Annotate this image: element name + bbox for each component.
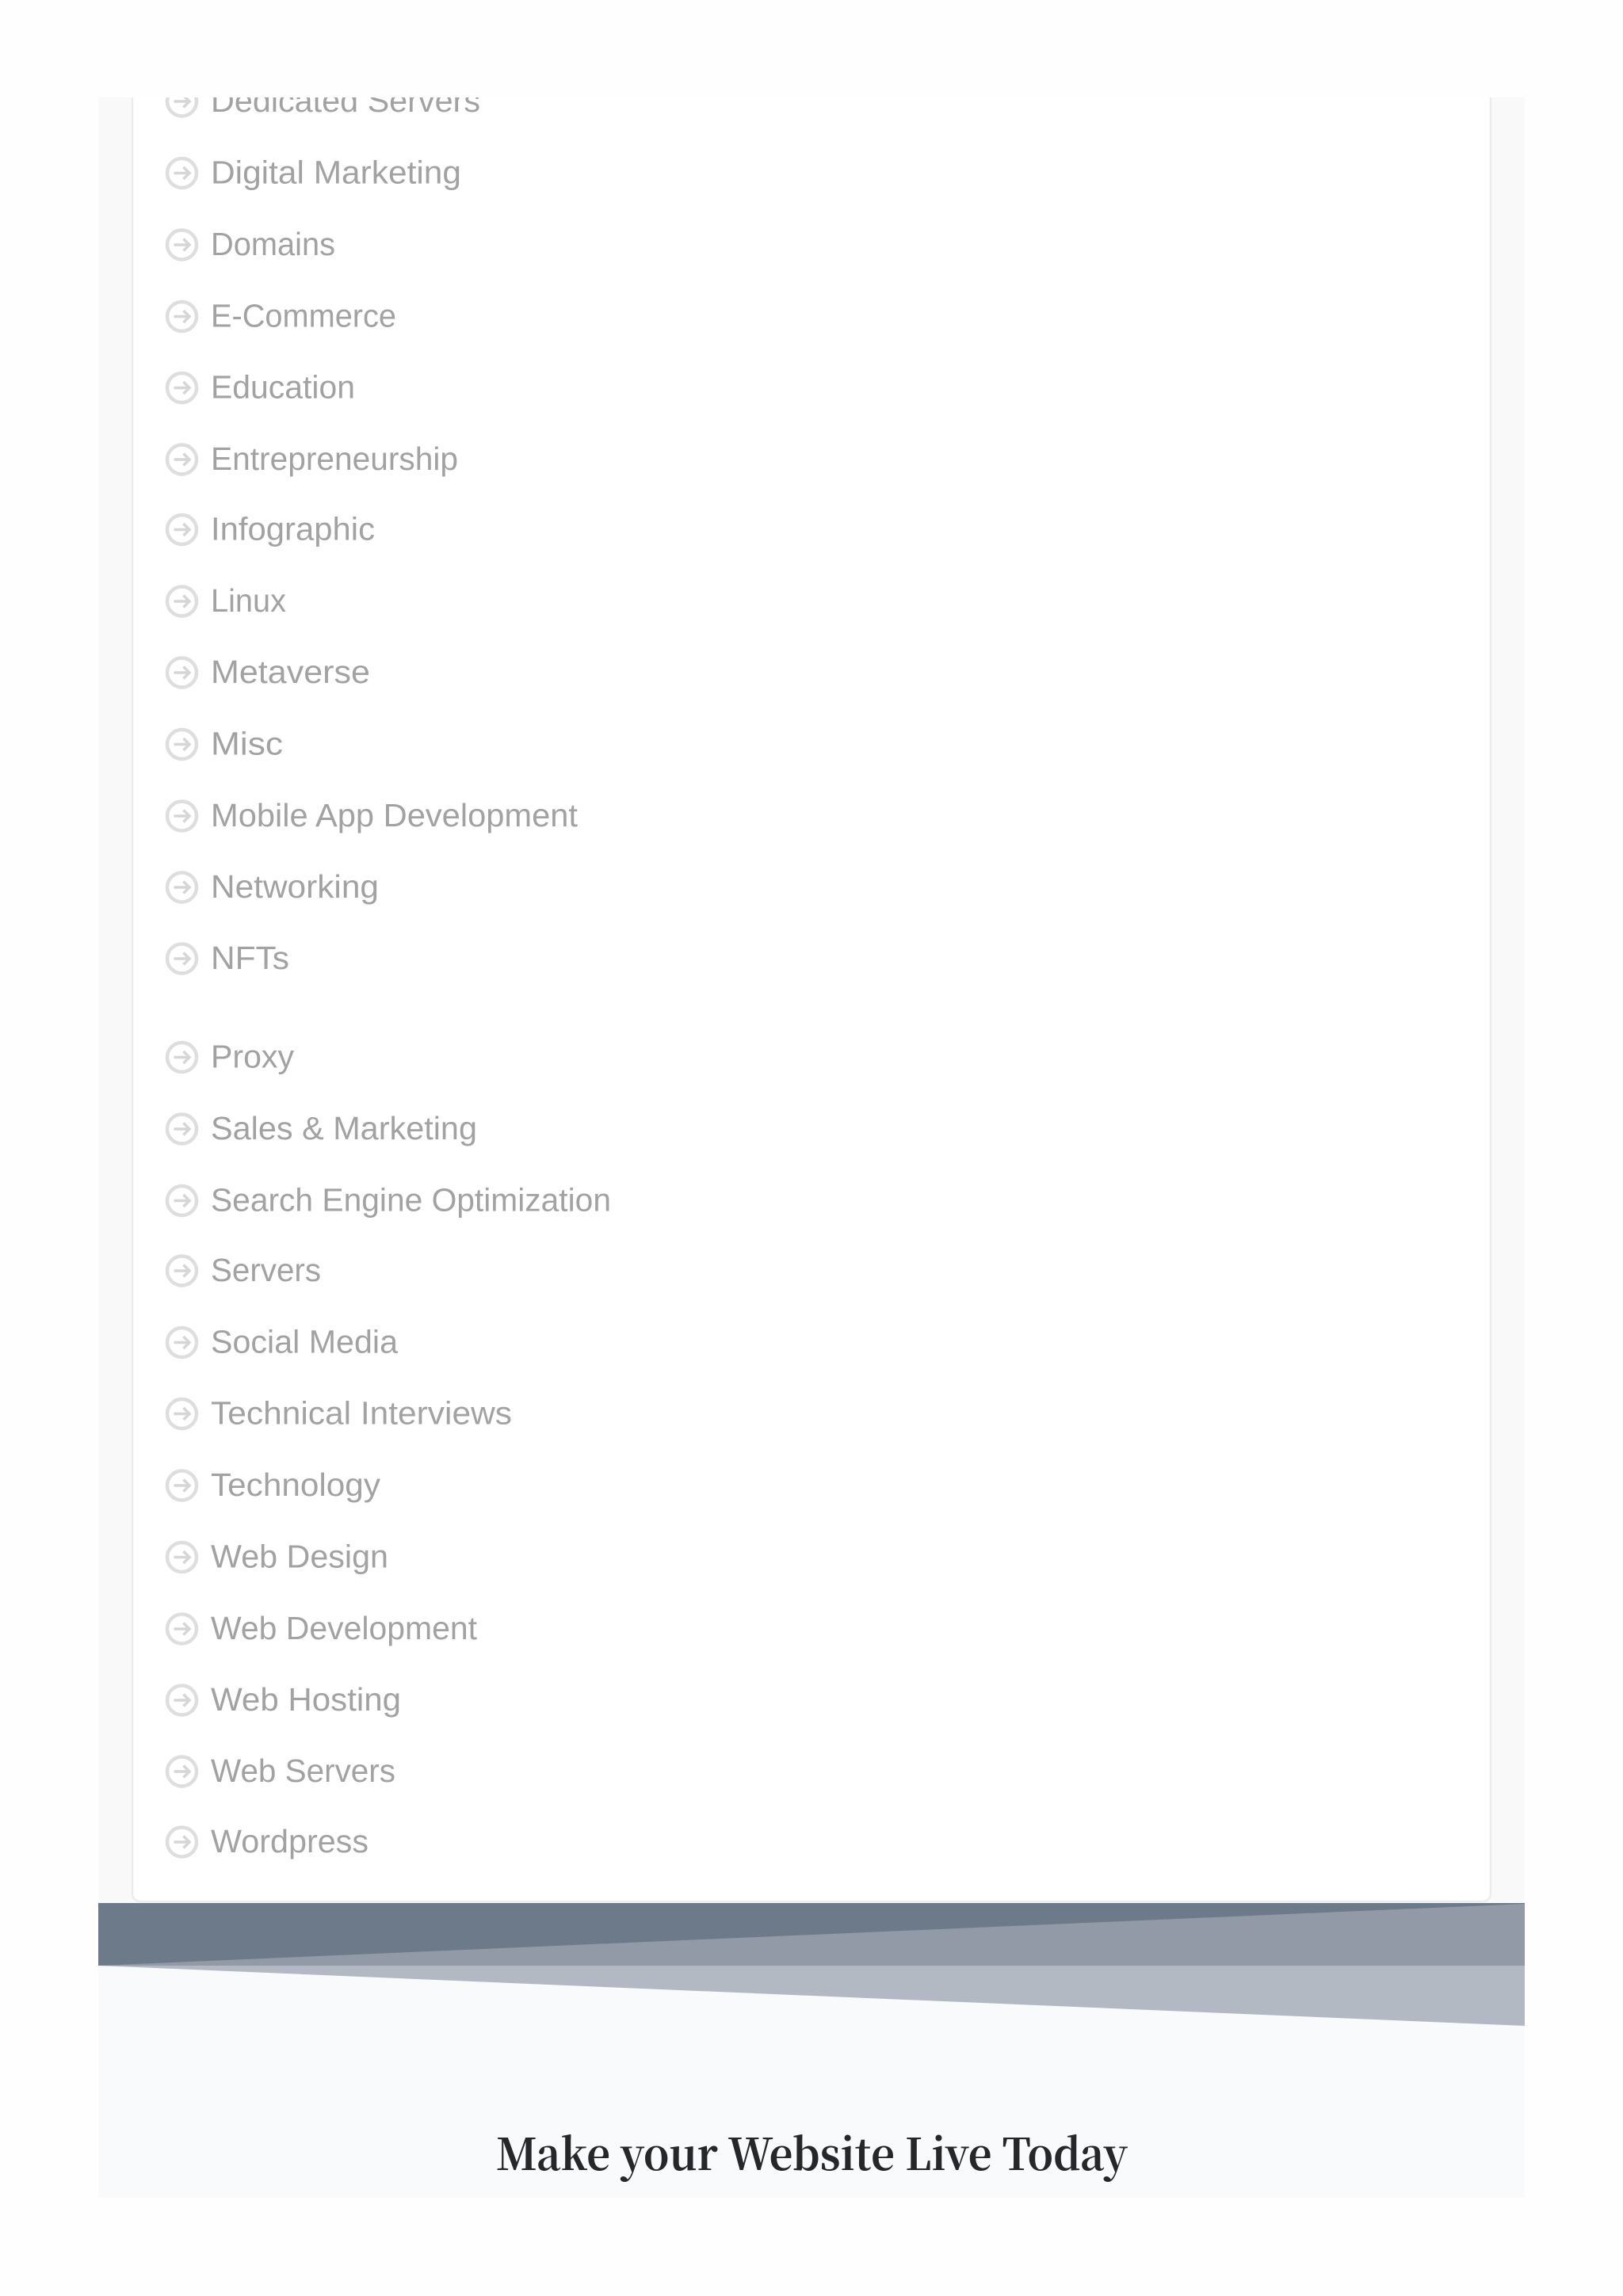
list item: Entrepreneurship: Entrepreneurship	[211, 441, 458, 477]
heading: Make your Website Live Today: Make your Website Live Today	[496, 2120, 1128, 2183]
list item: Servers: Servers	[211, 1252, 321, 1288]
panel: category list card	[132, 63, 1491, 1901]
list item: Linux	[167, 582, 286, 619]
panel: grey sidebar backdrop	[98, 97, 1525, 1904]
list item: Web Design: Web Design	[211, 1539, 388, 1575]
list item: Proxy: Proxy	[211, 1038, 294, 1074]
list item: Dedicated Servers	[165, 97, 479, 118]
panel: footer background	[98, 1966, 1525, 2198]
list item: Infographic: Infographic	[211, 510, 375, 547]
list item: Domains: Domains	[211, 226, 335, 262]
list item: Digital Marketing: Digital Marketing	[211, 154, 461, 190]
list item: Proxy	[167, 1038, 294, 1074]
list item: Networking: Networking	[211, 868, 379, 905]
list item: Web Development: Web Development	[211, 1610, 478, 1646]
list item: Web Hosting: Web Hosting	[211, 1681, 401, 1718]
list item: Web Servers: Web Servers	[211, 1753, 395, 1789]
list item: Misc	[167, 726, 283, 762]
footer angled band	[98, 1903, 1525, 2026]
list item: Search Engine Optimization: Search Engine Optimization	[211, 1182, 611, 1219]
list item: NFTs	[167, 940, 289, 976]
list item: Dedicated Servers: Dedicated Servers	[211, 82, 480, 119]
list item: Metaverse: Metaverse	[211, 654, 370, 690]
list item: Wordpress: Wordpress	[211, 1823, 369, 1859]
list item: Social Media: Social Media	[211, 1323, 398, 1360]
list item: Technology: Technology	[211, 1466, 381, 1503]
list item: Misc: Misc	[211, 726, 283, 762]
list item: Sales & Marketing: Sales & Marketing	[211, 1110, 477, 1146]
list item: Technical Interviews: Technical Interviews	[211, 1394, 512, 1431]
list item: NFTs: NFTs	[211, 940, 289, 976]
list item: Linux: Linux	[211, 582, 286, 619]
list item: Mobile App Development: Mobile App Development	[211, 797, 579, 833]
list item: E-Commerce: E-Commerce	[211, 298, 396, 334]
list item: Education: Education	[211, 369, 355, 406]
